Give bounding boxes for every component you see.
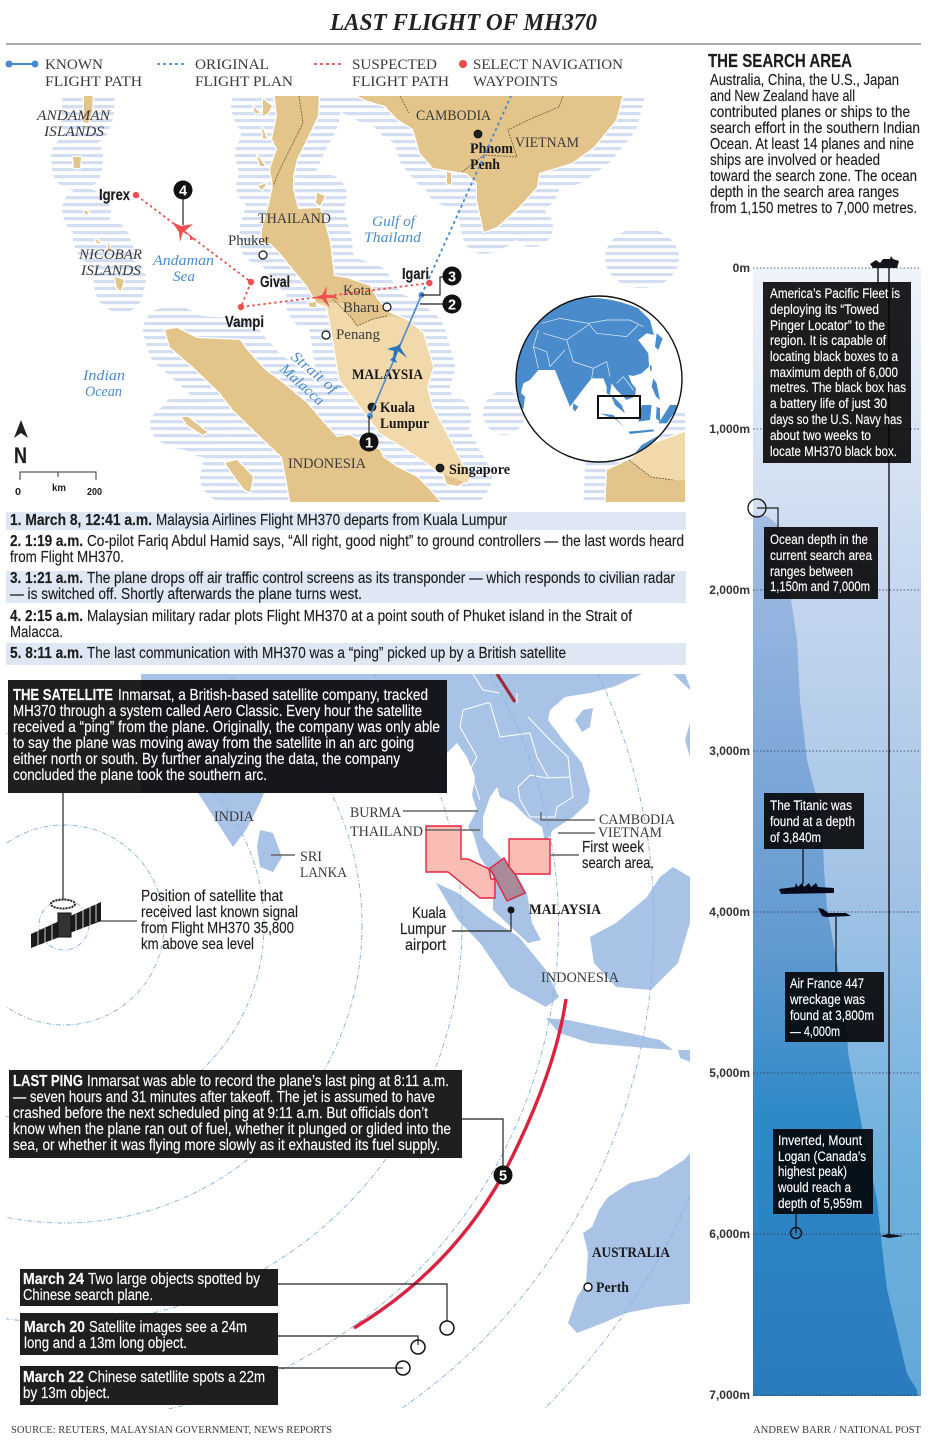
callout: Pacific Fleet: Pinger Locator” to the (770, 318, 885, 333)
search area polygons (426, 826, 550, 901)
map labels: Gulf of (372, 214, 417, 230)
numbered markers: 3 (448, 270, 456, 286)
last ping callout box: Inmarsat was able to record the plane’s last ping at 8:11 a.m. (87, 1073, 449, 1090)
timeline item 4: Malaysian military radar plots Flight MH370 at a point south of Phuket island in the Strait of (87, 608, 632, 625)
city markers (259, 130, 482, 472)
legend: known flight path: KNOWN (45, 57, 103, 73)
callout: Air France 447: wreckage was (789, 992, 865, 1007)
map labels: Lumpur (380, 416, 430, 432)
arc map labels: from Flight MH370 35,800 (141, 920, 294, 937)
timeline item 5: The last communication with MH370 was a “ping” picked up by a British satellite (87, 645, 566, 662)
callout: Pacific Fleet: maximum depth of 6,000 (770, 365, 898, 380)
marker 5: 5 (499, 1168, 507, 1184)
timeline item 2: 2. 1:19 a.m. (10, 533, 83, 550)
legend: navigation waypoints: SELECT NAVIGATION (473, 57, 623, 73)
scale bar (15, 472, 102, 498)
globe locator (513, 296, 682, 462)
timeline item 2: Co-pilot Fariq Abdul Hamid says, “All right, good night” to ground controllers — the last words heard (87, 533, 684, 550)
map labels: Kota (343, 283, 371, 299)
last ping callout box: crashed before the next scheduled ping at 9:11 a.m. But officials don’t (13, 1105, 428, 1122)
map labels: Bharu (343, 300, 379, 316)
callout: Pacific Fleet: days so the U.S. Navy has (770, 412, 902, 427)
satellite range rings (6, 674, 690, 1409)
icon: red plane west turn (312, 286, 338, 308)
March 22 callout: March 22 (23, 1369, 84, 1386)
callout: ocean depth (748, 499, 878, 599)
callout: Mount Logan: Inverted, Mount (778, 1133, 862, 1148)
callout: Pacific Fleet (763, 282, 911, 463)
numbered markers: 4 (179, 184, 187, 200)
callout: Titanic: The Titanic was (770, 798, 852, 813)
map labels: Gival (260, 274, 290, 291)
arc map labels: THAILAND (350, 824, 423, 840)
last ping callout box: — seven hours and 31 minutes after takeoff. The jet is assumed to have (13, 1089, 435, 1106)
arc map land (6, 674, 690, 1409)
timeline item 4 (10, 608, 632, 641)
map labels: Indian (82, 368, 125, 384)
map labels: Penang (336, 327, 380, 343)
callout: Titanic: of 3,840m (770, 830, 821, 845)
last ping callout box: LAST PING (13, 1073, 83, 1090)
title: LAST FLIGHT OF MH370 (329, 10, 597, 36)
compass: N (14, 443, 27, 468)
panel: search area text: and New Zealand have all (710, 88, 855, 105)
depth axis labels: 6,000m (709, 1227, 750, 1241)
arc map labels: INDONESIA (541, 970, 619, 986)
panel: search area text: ships are involved or headed (710, 152, 880, 169)
map labels: Igrex (99, 187, 130, 204)
callout: ocean depth: current search area (770, 548, 872, 563)
icon: Air France plane (818, 908, 851, 917)
timeline item 4: Malacca. (10, 624, 63, 641)
arc map labels: airport (405, 937, 446, 954)
panel: search area text: THE SEARCH AREA (708, 51, 852, 71)
map labels: ANDAMAN (36, 108, 111, 124)
legend: suspected flight path (314, 57, 449, 90)
March 22 callout (20, 1361, 410, 1405)
callout: ocean depth: Ocean depth in the (770, 532, 868, 547)
legend: suspected flight path: FLIGHT PATH (352, 74, 449, 90)
ocean floor profile (753, 515, 917, 1396)
map labels: Penh (470, 157, 500, 173)
depth axis labels (709, 261, 750, 1402)
arc map labels: Kuala (412, 905, 446, 922)
arc map labels: BURMA (350, 805, 401, 821)
satellite callout box: MH370 through a system called Aero Classic. Every hour the satellite (13, 703, 422, 720)
panel: ocean depth chart (709, 256, 921, 1402)
arc map labels: Position of satellite that (141, 888, 283, 905)
depth axis labels: 7,000m (709, 1388, 750, 1402)
callout: Pacific Fleet: America’s Pacific Fleet is (770, 286, 900, 301)
timeline item 4: 4. 2:15 a.m. (10, 608, 83, 625)
panel: search area text: contributed planes or ships to the (710, 104, 910, 121)
depth axis labels: 1,000m (709, 422, 750, 436)
callout: Air France 447: found at 3,800m (790, 1008, 874, 1023)
Australia (568, 1147, 695, 1333)
map labels: Strait of (287, 349, 342, 398)
arc map labels: Lumpur (400, 921, 447, 938)
panel: search area text: Australia, China, the U.S., Japan (710, 72, 899, 89)
callout: Air France 447: Air France 447 (790, 976, 864, 991)
icon: blue plane (387, 342, 407, 363)
icon: satellite (31, 793, 101, 948)
callout: ocean depth: ranges between (770, 564, 853, 579)
last ping callout box (9, 1070, 462, 1158)
map labels: Phuket (228, 233, 270, 249)
map labels: CAMBODIA (416, 108, 491, 124)
legend: navigation waypoints (459, 57, 623, 90)
timeline item 1: 1. March 8, 12:41 a.m. (10, 512, 152, 529)
depth axis labels: 2,000m (709, 583, 750, 597)
callout: Pacific Fleet: locating black boxes to a (770, 349, 898, 364)
March 22 callout: Chinese satetllite spots a 22m (88, 1369, 265, 1386)
map labels: Malacca (276, 360, 327, 409)
map labels: Kuala (380, 400, 416, 416)
callout: ocean depth: 1,150m and 7,000m (770, 579, 870, 594)
map labels (36, 108, 579, 478)
timeline item 1: Malaysia Airlines Flight MH370 departs from Kuala Lumpur (156, 512, 508, 529)
northern arc (497, 674, 515, 702)
map labels: THAILAND (258, 211, 331, 227)
map labels: Phnom (470, 141, 513, 157)
March 20 callout: long and a 13m long object. (24, 1335, 187, 1352)
satellite callout box: concluded the plane took the southern arc. (13, 767, 267, 784)
callout: Pacific Fleet: deploying its “Towed (770, 302, 879, 317)
arc map labels (141, 805, 675, 1296)
callout: Titanic: found at a depth (770, 814, 855, 829)
callout: Titanic (764, 793, 864, 884)
panel: search area text (708, 51, 920, 217)
legend: navigation waypoints: WAYPOINTS (473, 74, 558, 90)
water column (753, 268, 921, 1396)
March 24 callout: March 24 (23, 1271, 84, 1288)
arc map labels: First week (582, 839, 645, 856)
callout: Mount Logan: would reach a (777, 1180, 851, 1195)
arc map labels: VIETNAM (598, 825, 662, 841)
March 22 callout: by 13m object. (23, 1385, 110, 1402)
arc map labels: received last known signal (141, 904, 298, 921)
legend (6, 57, 623, 90)
map labels: NICOBAR (78, 247, 142, 263)
scale bar: 200 (87, 487, 102, 498)
southern arc (354, 999, 566, 1328)
timeline item 5: 5. 8:11 a.m. (10, 645, 83, 662)
satellite callout box: THE SATELLITE (13, 687, 113, 704)
original flight plan line (422, 96, 511, 295)
arc map labels: CAMBODIA (599, 812, 675, 828)
arc map labels: Perth (596, 1280, 629, 1296)
icon: red plane 4 (172, 222, 195, 242)
map labels: Sea (173, 269, 195, 285)
panel: flight path map (14, 90, 690, 510)
callout: Pacific Fleet: locate MH370 black box. (770, 444, 897, 459)
depth axis labels: 4,000m (709, 905, 750, 919)
last ping callout box: know when the plane ran out of fuel, whether it plunged or glided into the (13, 1121, 451, 1138)
map labels: VIETNAM (515, 135, 579, 151)
map labels: ISLANDS (43, 124, 105, 140)
map labels: Igari (402, 266, 429, 283)
known flight path (367, 292, 424, 419)
satellite callout box: Inmarsat, a British-based satellite company, tracked (118, 687, 428, 704)
depth axis labels: 5,000m (709, 1066, 750, 1080)
satellite callout box: either north or south. By further analyzing the data, the company (13, 751, 400, 768)
arc map labels: SRI (300, 849, 322, 865)
legend: known flight path: FLIGHT PATH (45, 74, 142, 90)
source credit: SOURCE: REUTERS, MALAYSIAN GOVERNMENT, NEWS REPORTS (11, 1425, 332, 1436)
panel: satellite arc map (6, 674, 690, 1409)
arc map labels: search area. (582, 855, 654, 872)
scale bar: km (52, 483, 66, 494)
map labels: Thailand (364, 230, 422, 246)
Kuala Lumpur airport marker (452, 906, 514, 931)
legend: original flight plan: ORIGINAL (195, 57, 269, 73)
panel: search area text: depth in the search area ranges (710, 184, 899, 201)
depth axis labels: 0m (733, 261, 750, 275)
byline: ANDREW BARR / NATIONAL POST (753, 1425, 922, 1436)
timeline item 3: 3. 1:21 a.m. (10, 570, 83, 587)
compass (14, 420, 28, 468)
satellite callout box: received a “ping” from the plane. Originally, the company was only able (13, 719, 440, 736)
map labels: Andaman (152, 253, 214, 269)
callout: Pacific Fleet: a battery life of just 30 (770, 396, 887, 411)
map labels: Singapore (449, 462, 511, 478)
Perth marker (584, 1283, 592, 1291)
satellite callout box (8, 680, 447, 793)
numbered markers: 2 (448, 298, 456, 314)
callout: Pacific Fleet: metres. The black box has (770, 380, 906, 395)
marker 5 (462, 1119, 512, 1184)
March 20 callout: March 20 (24, 1319, 85, 1336)
timeline item 3: The plane drops off air traffic control screens as its transponder — which responds to civilian radar (87, 570, 676, 587)
depth axis labels: 3,000m (709, 744, 750, 758)
timeline item 3 (10, 570, 676, 603)
March 20 callout: Satellite images see a 24m (89, 1319, 247, 1336)
callout: Mount Logan: depth of 5,959m (778, 1196, 862, 1211)
timeline item 2: from Flight MH370. (10, 549, 124, 566)
arc map labels: INDIA (214, 809, 254, 825)
March 24 callout: Two large objects spotted by (88, 1271, 260, 1288)
map labels: Ocean (85, 384, 122, 400)
March 20 callout (20, 1313, 425, 1355)
timeline item 1 (10, 512, 508, 529)
map labels: Vampi (225, 314, 264, 331)
March 24 callout: Chinese search plane. (23, 1287, 153, 1304)
arc map labels: LANKA (300, 865, 347, 881)
legend: known flight path (6, 57, 142, 90)
arc map labels: AUSTRALIA (592, 1245, 670, 1261)
map land and water (66, 90, 690, 510)
last ping callout box: sea, or whether it was flying more slowly as it exhausted its fuel supply. (13, 1137, 440, 1154)
legend: suspected flight path: SUSPECTED (352, 57, 437, 73)
arc map leader lines (85, 811, 595, 921)
map labels: INDONESIA (288, 456, 366, 472)
icon: Titanic (779, 883, 834, 894)
callout: Mount Logan: highest peak) (778, 1164, 847, 1179)
callout: Air France 447 (785, 917, 884, 1042)
numbered markers: 1 (365, 436, 373, 452)
panel: timeline (6, 512, 686, 665)
legend: original flight plan (157, 57, 293, 90)
arc map labels: MALAYSIA (529, 902, 601, 918)
arc map labels: km above sea level (141, 936, 254, 953)
callout: Pacific Fleet: region. It is capable of (770, 333, 886, 348)
depth gridlines (753, 268, 921, 1395)
icon: surface ship (870, 256, 899, 268)
suspected flight path (133, 192, 433, 310)
callout: Mount Logan (773, 1129, 873, 1238)
March 24 callout (20, 1269, 454, 1335)
callout: Mount Logan: Logan (Canada's (778, 1149, 866, 1164)
map labels: ISLANDS (80, 263, 142, 279)
map labels: MALAYSIA (352, 367, 423, 383)
icon: pinger locator (880, 1234, 904, 1238)
towed pinger cable (878, 268, 889, 1234)
numbered markers (174, 180, 462, 452)
satellite callout box: to say the plane was moving away from the satellite in an arc going (13, 735, 414, 752)
timeline item 2 (10, 533, 684, 566)
legend: original flight plan: FLIGHT PLAN (195, 74, 293, 90)
timeline item 3: — is switched off. Shortly afterwards the plane turns west. (10, 586, 362, 603)
scale bar: 0 (15, 487, 21, 498)
callout: Air France 447: — 4,000m (790, 1024, 840, 1039)
callout: Pacific Fleet: about two weeks to (770, 428, 871, 443)
